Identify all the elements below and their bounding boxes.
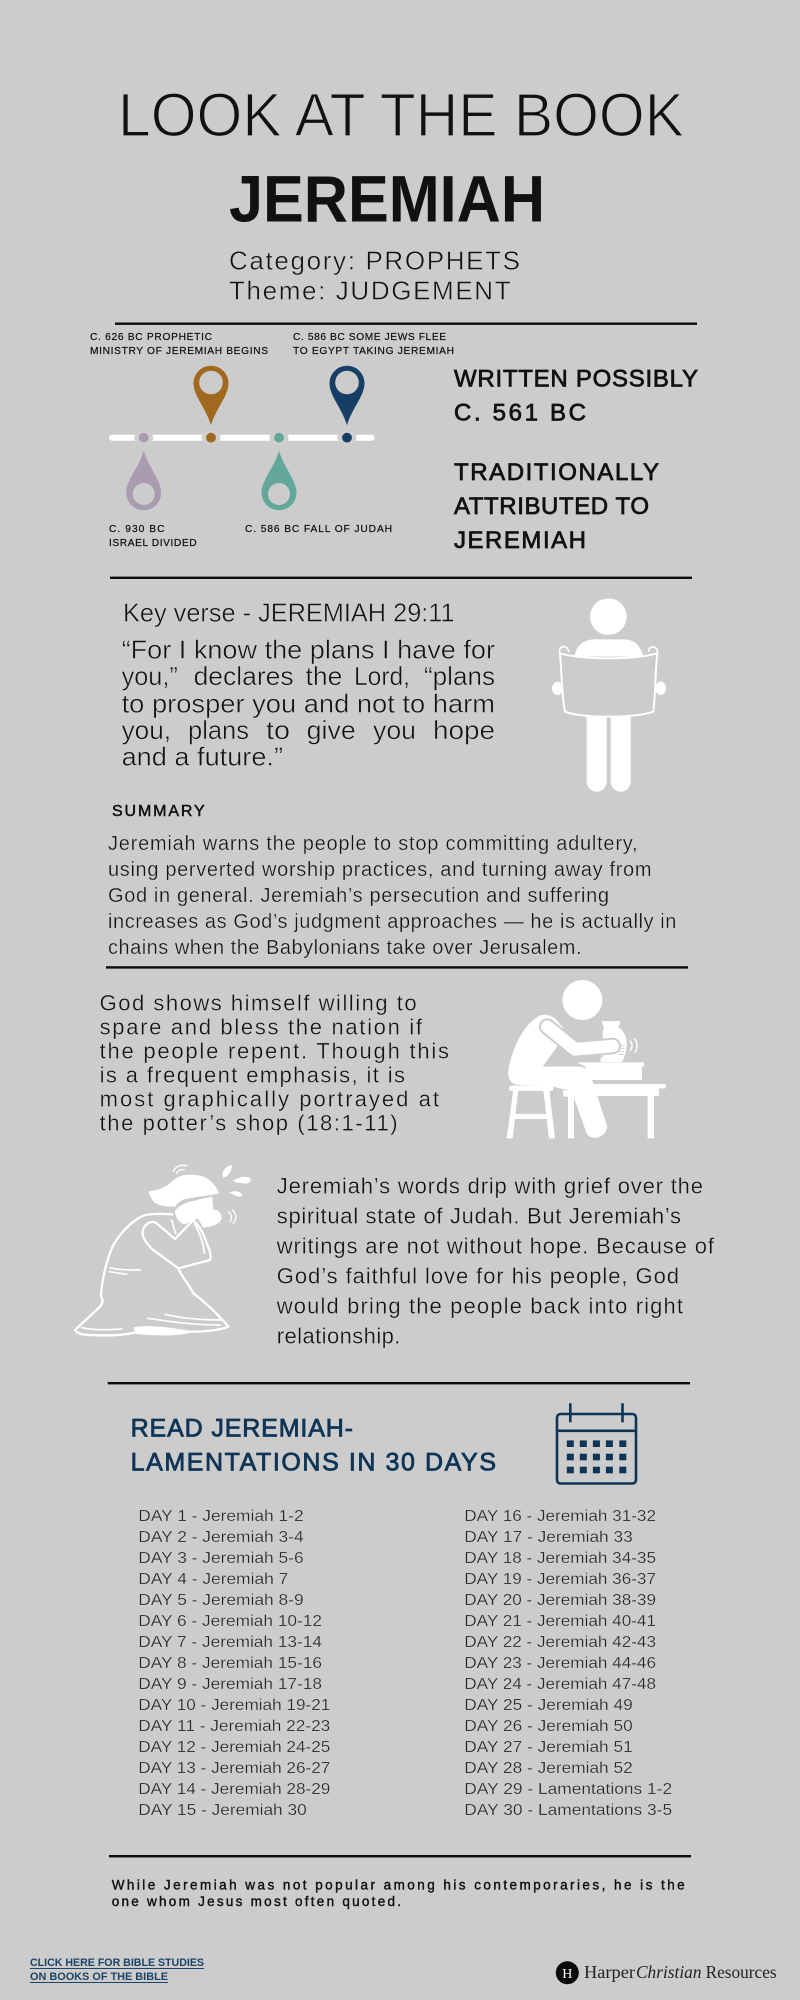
reading plan: days 1 to 15: DAY 6 - Jeremiah 10-12 xyxy=(138,1613,322,1630)
key verse text: “For I know the plans I have for xyxy=(122,636,495,664)
reading plan: days 1 to 15: DAY 13 - Jeremiah 26-27 xyxy=(138,1760,330,1777)
icon: navy pin xyxy=(330,366,364,425)
grief text block: would bring the people back into right xyxy=(276,1293,683,1318)
reading plan: days 16 to 30: DAY 18 - Jeremiah 34-35 xyxy=(464,1550,656,1567)
summary text: chains when the Babylonians take over Jerusalem. xyxy=(108,937,582,959)
summary text: increases as God’s judgment approaches — he is actually in xyxy=(108,911,676,933)
key verse text: to xyxy=(266,717,290,745)
icon: potter at wheel xyxy=(507,980,666,1138)
key verse text: give xyxy=(307,717,356,745)
vase xyxy=(601,1021,627,1062)
reading plan: days 16 to 30: DAY 30 - Lamentations 3-5 xyxy=(464,1802,672,1819)
summary heading: SUMMARY xyxy=(112,803,205,820)
potter text block: spare and bless the nation if xyxy=(100,1015,423,1040)
summary text xyxy=(108,833,676,959)
key verse text: “plans xyxy=(424,663,495,691)
robe outline xyxy=(75,1214,228,1335)
reading plan heading xyxy=(131,1415,496,1477)
reading plan heading: LAMENTATIONS IN 30 DAYS xyxy=(131,1449,496,1477)
timeline labels: C. 586 BC SOME JEWS FLEE xyxy=(293,332,446,343)
reading plan: days 1 to 15: DAY 11 - Jeremiah 22-23 xyxy=(138,1718,330,1735)
timeline labels: C. 930 BC xyxy=(109,524,164,535)
category and theme xyxy=(229,245,520,305)
written and attributed text: ATTRIBUTED TO xyxy=(454,493,649,520)
reading plan: days 1 to 15 xyxy=(138,1508,330,1819)
reading plan: days 16 to 30: DAY 21 - Jeremiah 40-41 xyxy=(464,1613,656,1630)
logo: HarperChristian Resources: H xyxy=(562,1967,572,1982)
timeline labels xyxy=(90,332,454,549)
icon: person reading scroll xyxy=(552,598,666,792)
reading plan: days 1 to 15: DAY 2 - Jeremiah 3-4 xyxy=(138,1529,304,1546)
potter text block: most graphically portrayed at xyxy=(100,1087,439,1112)
reading plan: days 16 to 30: DAY 22 - Jeremiah 42-43 xyxy=(464,1634,656,1651)
reading plan: days 16 to 30: DAY 19 - Jeremiah 36-37 xyxy=(464,1571,656,1588)
reading plan: days 1 to 15: DAY 3 - Jeremiah 5-6 xyxy=(138,1550,304,1567)
reading plan: days 1 to 15: DAY 8 - Jeremiah 15-16 xyxy=(138,1655,322,1672)
reading plan: days 16 to 30: DAY 27 - Jeremiah 51 xyxy=(464,1739,633,1756)
panel: timeline xyxy=(90,332,454,549)
icon: grieving prophet xyxy=(75,1165,251,1335)
folds xyxy=(82,1220,222,1330)
logo: HarperChristian Resources: Harper xyxy=(584,1962,635,1982)
motion marks xyxy=(630,1038,637,1053)
icon: purple pin xyxy=(126,451,161,510)
title xyxy=(118,81,684,236)
icon: brown pin xyxy=(194,366,228,425)
closing note: While Jeremiah was not popular among his contemporaries, he is the xyxy=(112,1877,685,1892)
summary text: Jeremiah warns the people to stop committing adultery, xyxy=(108,833,638,855)
reading plan: days 16 to 30: DAY 28 - Jeremiah 52 xyxy=(464,1760,633,1777)
tears xyxy=(223,1165,251,1197)
grief text block: God’s faithful love for his people, God xyxy=(277,1263,679,1288)
reading plan: days 1 to 15: DAY 1 - Jeremiah 1-2 xyxy=(138,1508,304,1525)
written and attributed text: TRADITIONALLY xyxy=(454,459,659,486)
timeline labels: C. 586 BC FALL OF JUDAH xyxy=(245,524,392,535)
wheel tub xyxy=(577,1062,644,1080)
grief text block: Jeremiah’s words drip with grief over the xyxy=(277,1173,703,1198)
logo: HarperChristian Resources xyxy=(556,1961,777,1984)
key verse text: hope xyxy=(433,717,495,745)
grief text block: relationship. xyxy=(277,1323,400,1348)
stool xyxy=(509,1086,553,1091)
face and hands xyxy=(175,1197,222,1228)
reading plan: days 16 to 30: DAY 23 - Jeremiah 44-46 xyxy=(464,1655,656,1672)
key verse text: to prosper you and not to harm xyxy=(122,690,495,718)
potter text block: the potter’s shop (18:1-11) xyxy=(100,1111,398,1136)
link: bible studies: CLICK HERE FOR BIBLE STUDIES xyxy=(30,1957,204,1969)
reading plan: days 16 to 30 xyxy=(464,1508,672,1819)
reading plan: days 1 to 15: DAY 12 - Jeremiah 24-25 xyxy=(138,1739,330,1756)
written and attributed text: WRITTEN POSSIBLY xyxy=(454,366,698,393)
reading plan: days 16 to 30: DAY 29 - Lamentations 1-2 xyxy=(464,1781,672,1798)
potter text block: God shows himself willing to xyxy=(100,991,417,1016)
reading plan: days 1 to 15: DAY 14 - Jeremiah 28-29 xyxy=(138,1781,330,1798)
summary text: God in general. Jeremiah’s persecution and suffering xyxy=(108,885,609,907)
link: bible studies xyxy=(30,1957,204,1983)
reading plan: days 1 to 15: DAY 15 - Jeremiah 30 xyxy=(138,1802,307,1819)
title: LOOK AT THE BOOK xyxy=(118,81,684,149)
timeline labels: MINISTRY OF JEREMIAH BEGINS xyxy=(90,346,268,357)
reading plan: days 1 to 15: DAY 10 - Jeremiah 19-21 xyxy=(138,1697,330,1714)
key verse text: and a future.” xyxy=(122,744,283,772)
icon: calendar xyxy=(557,1403,636,1484)
logo: HarperChristian Resources: Resources xyxy=(706,1962,777,1982)
written and attributed text xyxy=(454,366,698,554)
potter text block: the people repent. Though this xyxy=(100,1039,449,1064)
reading plan: days 16 to 30: DAY 20 - Jeremiah 38-39 xyxy=(464,1592,656,1609)
key verse text: the xyxy=(306,663,342,691)
arm xyxy=(547,1027,613,1049)
link: bible studies: ON BOOKS OF THE BIBLE xyxy=(30,1971,168,1983)
reading plan: days 16 to 30: DAY 24 - Jeremiah 47-48 xyxy=(464,1676,656,1693)
reading plan: days 1 to 15: DAY 4 - Jeremiah 7 xyxy=(138,1571,288,1588)
written and attributed text: JEREMIAH xyxy=(454,527,586,554)
key verse text: declares xyxy=(194,663,294,691)
key verse text: you xyxy=(373,717,416,745)
icon: teal pin xyxy=(262,451,296,510)
reading plan heading: READ JEREMIAH- xyxy=(131,1415,353,1443)
timeline bar xyxy=(109,431,374,445)
reading plan: days 16 to 30: DAY 25 - Jeremiah 49 xyxy=(464,1697,633,1714)
grief text block: spiritual state of Judah. But Jeremiah’s xyxy=(277,1203,681,1228)
key verse heading: Key verse - JEREMIAH 29:11 xyxy=(123,600,455,628)
closing note xyxy=(112,1877,685,1909)
timeline labels: ISRAEL DIVIDED xyxy=(109,538,197,549)
reading plan: days 1 to 15: DAY 9 - Jeremiah 17-18 xyxy=(138,1676,322,1693)
timeline labels: C. 626 BC PROPHETIC xyxy=(90,332,212,343)
body xyxy=(508,1015,607,1138)
logo: HarperChristian Resources: Christian xyxy=(636,1962,702,1982)
reading plan: days 1 to 15: DAY 5 - Jeremiah 8-9 xyxy=(138,1592,304,1609)
hair xyxy=(148,1175,219,1207)
reading plan: days 16 to 30: DAY 16 - Jeremiah 31-32 xyxy=(464,1508,656,1525)
potter text block xyxy=(100,991,449,1136)
reading plan: days 16 to 30: DAY 17 - Jeremiah 33 xyxy=(464,1529,633,1546)
key verse text: Lord, xyxy=(354,663,410,691)
title: JEREMIAH xyxy=(229,162,545,236)
key verse text: you,” xyxy=(122,663,178,691)
reading plan: days 16 to 30: DAY 26 - Jeremiah 50 xyxy=(464,1718,633,1735)
key verse text: plans xyxy=(188,717,249,745)
grief text block xyxy=(276,1173,715,1348)
closing note: one whom Jesus most often quoted. xyxy=(112,1894,401,1909)
key verse text: you, xyxy=(122,717,171,745)
potter text block: is a frequent emphasis, it is xyxy=(100,1063,405,1088)
summary text: using perverted worship practices, and turning away from xyxy=(108,859,652,881)
table xyxy=(563,1084,666,1138)
category and theme: Theme: JUDGEMENT xyxy=(229,275,511,305)
grief text block: writings are not without hope. Because of xyxy=(276,1233,715,1258)
reading plan: days 1 to 15: DAY 7 - Jeremiah 13-14 xyxy=(138,1634,322,1651)
category and theme: Category: PROPHETS xyxy=(229,245,520,275)
written and attributed text: C. 561 BC xyxy=(454,400,586,427)
key verse text xyxy=(122,636,495,772)
timeline labels: TO EGYPT TAKING JEREMIAH xyxy=(293,346,454,357)
